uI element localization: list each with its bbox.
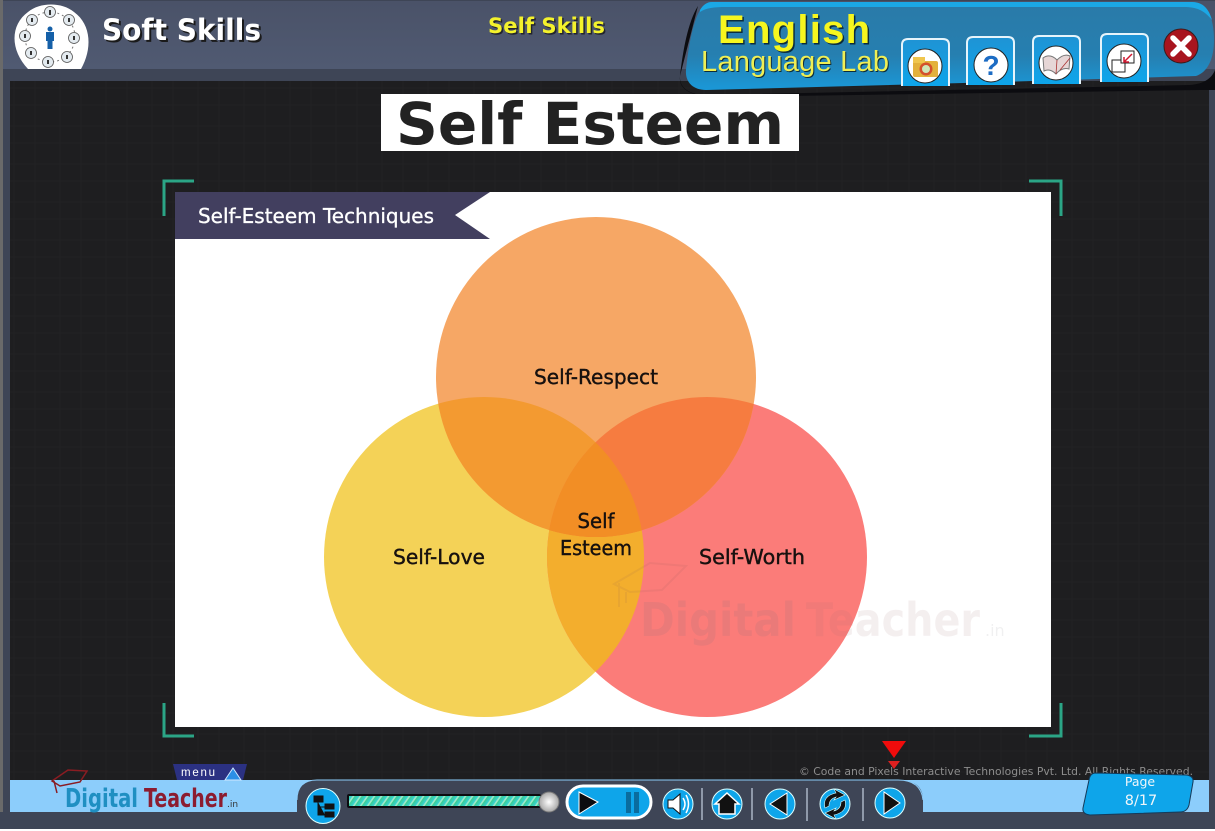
icon: help tab [967,37,1014,85]
panel: English Language Lab: Language Lab [701,46,889,78]
label: Self Esteem: Esteem [560,536,632,560]
panel: content frame corners [164,181,1061,736]
watermark: Digital Teacher: Teacher [806,593,980,647]
icon: window resize tab [1101,34,1148,82]
icon: close button [1164,29,1198,63]
icon: soft skills logo [14,4,89,69]
badge: page number [1083,773,1193,815]
watermark: Digital Teacher: Digital [640,593,796,647]
icon: home [712,789,742,819]
chart: Venn diagram [324,217,867,717]
heading ribbon: Self-Esteem Techniques: Self-Esteem Techniques [198,204,434,228]
panel: English Language Lab: English [718,8,870,52]
icon: folder clock tab [902,39,949,86]
circle: Self-Love [324,397,644,717]
progress bar [347,792,559,812]
circle: Self-Worth [547,397,867,717]
overlap: love and worth [547,530,644,672]
panel: media controls [297,780,923,829]
text: Language Lab: Language Lab [702,47,890,79]
icon: previous [765,789,795,819]
heading: Soft Skills: Soft Skills [104,15,263,49]
badge: page number: Page [1125,774,1155,789]
watermark: Digital Teacher [614,563,1005,647]
text: English: English [720,10,872,54]
logo: Digital Teacher: Teacher [144,784,227,814]
badge: page number: 8/17 [1125,793,1157,809]
title: Self Esteem: Self Esteem [396,90,784,158]
heading: Self Skills: Self Skills [488,14,605,38]
heading ribbon: Self-Esteem Techniques [175,192,490,239]
overlap: respect and worth [550,397,754,537]
overlap: respect and love [438,397,596,530]
heading: Self Skills: Self Skills [490,16,606,40]
marker: red arrow [882,741,906,769]
icon: volume [663,789,693,819]
panel: English Language Lab [680,2,1215,97]
heading: Soft Skills: Soft Skills [102,13,261,47]
label: Self Esteem [560,509,632,560]
label: Self Esteem: Self [578,509,615,533]
label: Self-Love: Self-Love [393,545,485,569]
text: copyright: © Code and Pixels Interactive Technologies Pvt. Ltd. All Rights Reserved. [799,766,1193,778]
icon: book tab [1033,36,1080,84]
icon: tree menu [306,788,340,824]
circle: Self-Respect [436,217,756,537]
footer bar [0,780,1215,831]
button: menu: menu [181,767,215,779]
overlap: centre [550,442,642,537]
button: play and pause [567,786,651,818]
logo: Digital Teacher: Digital [65,784,138,814]
icon: help tab: ? [982,50,1000,81]
label: Self-Worth: Self-Worth [699,545,805,569]
icon: replay [820,789,850,819]
panel: white content card [175,192,1051,727]
logo: Digital Teacher [52,770,238,814]
icon: next [875,788,905,818]
label: Self-Respect: Self-Respect [534,365,658,389]
top header bar [0,1,1215,69]
button: menu [173,764,247,780]
watermark: Digital Teacher: .in [985,621,1005,640]
logo: Digital Teacher: .in [227,800,238,810]
